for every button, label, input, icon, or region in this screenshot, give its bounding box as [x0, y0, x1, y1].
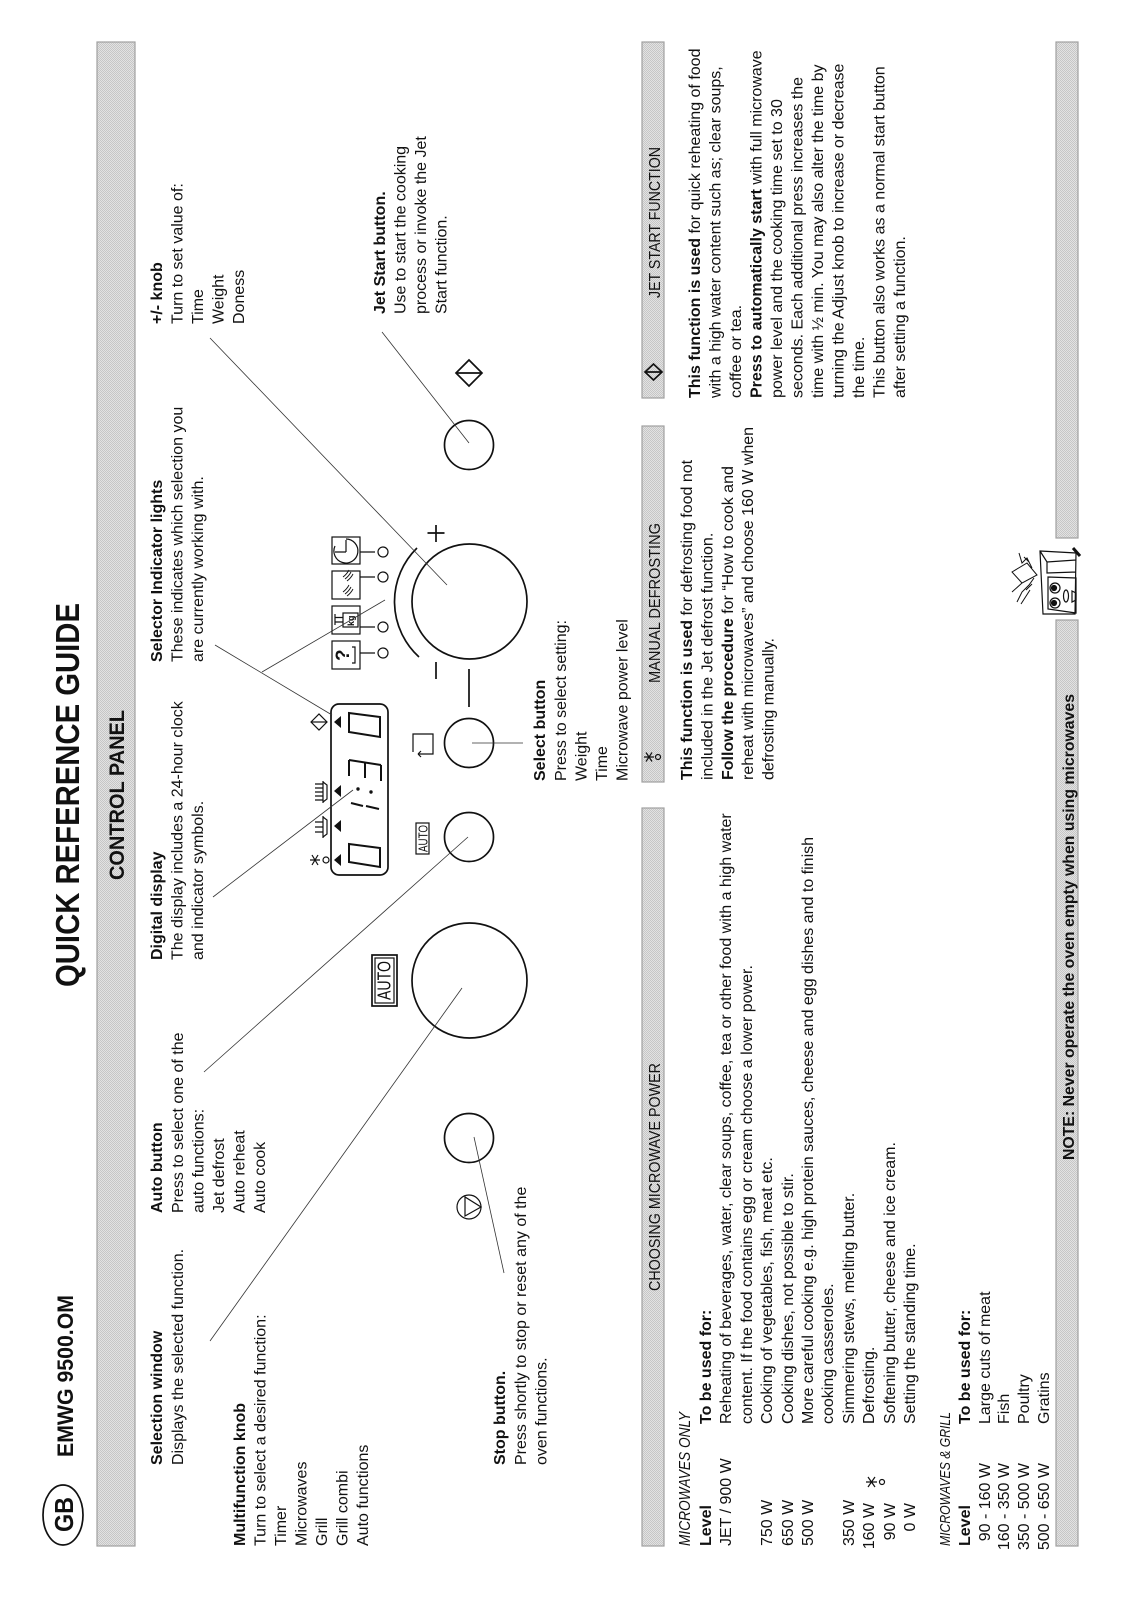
knob arc	[395, 548, 419, 657]
callout: jet start button: process or invoke the Jet	[413, 136, 430, 314]
callout: selection window: Displays the selected function.	[170, 1249, 187, 1465]
table: microwaves only: 0 W	[902, 1502, 919, 1531]
multifunction knob	[412, 923, 527, 1038]
icon: weight box: kg	[346, 615, 356, 626]
icon: jet start diamond in bar	[645, 364, 662, 380]
callout: selection window: Selection window	[149, 1330, 166, 1465]
callout: select button: Time	[594, 746, 611, 781]
icon: jet start diamond	[456, 360, 482, 386]
callout: plus minus knob: +/- knob	[149, 262, 166, 324]
icon: grill symbol	[315, 781, 327, 803]
heading: choosing microwave power: CHOOSING MICROWAVE POWER	[647, 1063, 664, 1291]
callout: multifunction knob: Turn to select a desired function:	[253, 1314, 270, 1546]
table: microwaves only: Cooking of vegetables, fish, meat etc.	[759, 1157, 776, 1424]
icon: display jet diamond	[311, 714, 327, 730]
table: microwaves only: More careful cooking e.g. high protein sauces, cheese and egg dishes and to finish	[800, 837, 817, 1424]
icon: waves box	[332, 570, 360, 599]
digital display	[331, 704, 388, 875]
indicator connectors and lamps	[360, 547, 388, 658]
auto button	[444, 812, 494, 862]
table: microwaves and grill: Gratins	[1036, 1372, 1053, 1424]
callout: selector indicator lights: are currently working with.	[190, 476, 207, 662]
icon: auto label small: AUTO	[416, 825, 430, 852]
model name: EMWG 9500.OM	[53, 1295, 78, 1457]
icon: minus sign	[435, 662, 437, 679]
icon: table defrost snowflake	[866, 1477, 884, 1487]
table: microwaves and grill: Fish	[996, 1394, 1013, 1424]
table: microwaves only: 160 W	[861, 1502, 878, 1549]
stop button	[444, 1114, 494, 1162]
callout: auto button: auto functions:	[190, 1109, 208, 1213]
callout: plus minus knob: Turn to set value of:	[170, 183, 186, 324]
text: manual defrosting: This function is used for defrosting food not	[679, 459, 696, 780]
callout: jet start button: Start function.	[434, 215, 450, 314]
table: microwaves only: 350 W	[841, 1499, 858, 1546]
text: jet start function	[687, 49, 909, 399]
callout: auto button: Auto reheat	[232, 1130, 249, 1213]
table: microwaves only: Simmering stews, melting butter.	[841, 1193, 858, 1424]
note bar: lower segment	[1056, 620, 1078, 1546]
title: QUICK REFERENCE GUIDE	[49, 603, 86, 987]
table: microwaves only: Softening butter, cheese and ice cream.	[882, 1142, 899, 1424]
callout: multifunction knob: Grill combi	[335, 1470, 352, 1546]
callout: jet start button	[372, 136, 450, 314]
table: microwaves only: Reheating of beverages, water, clear soups, coffee, tea or other food with a high water	[718, 813, 735, 1424]
table: microwaves only	[677, 813, 919, 1549]
table: microwaves and grill: Poultry	[1016, 1374, 1033, 1424]
text: manual defrosting: defrosting manually.	[760, 638, 778, 780]
icon: stop symbol	[457, 1195, 481, 1219]
table: microwaves and grill: 350 - 500 W	[1016, 1462, 1033, 1550]
callout: plus minus knob: Weight	[210, 274, 228, 324]
callout: auto button: Auto button	[149, 1122, 166, 1213]
table: microwaves and grill: Large cuts of meat	[977, 1291, 994, 1424]
table: microwaves and grill: 90 - 160 W	[977, 1462, 994, 1541]
callout: stop button: oven functions.	[534, 1357, 550, 1465]
text: jet start function: after setting a function.	[892, 236, 909, 398]
icon: oven face	[1050, 583, 1076, 608]
text: jet start function: with a high water content such as; clear soups,	[708, 66, 724, 399]
digit 0	[349, 844, 380, 867]
header bar: control panel	[97, 42, 135, 1546]
text: manual defrosting: Follow the procedure for “How to cook and	[720, 466, 737, 780]
callout: jet start button: Jet Start button.	[372, 191, 389, 314]
callout: multifunction knob: Microwaves	[294, 1462, 311, 1546]
text: jet start function: This button also works as a normal start button	[872, 66, 888, 398]
callout: select button: Select button	[532, 680, 549, 781]
icon: help box: ?	[333, 649, 354, 661]
icon: oven body	[1040, 551, 1076, 614]
table: microwaves only: 650 W	[780, 1499, 797, 1546]
text: jet start function: This function is used for quick reheating of food	[687, 49, 704, 398]
table: microwaves only: To be used for:	[698, 1310, 715, 1424]
select button	[444, 718, 494, 768]
text: manual defrosting: reheat with microwaves” and choose 160 W when	[740, 427, 757, 780]
callout: auto button	[149, 1032, 269, 1213]
callout: auto button: Press to select one of the	[170, 1032, 187, 1213]
badge: GB country ellipse	[43, 1485, 83, 1545]
callout: plus minus knob: Doness	[231, 270, 248, 324]
section bar: manual defrosting	[642, 426, 664, 782]
heading: jet start function: JET START FUNCTION	[647, 147, 664, 298]
digit 3	[349, 760, 381, 781]
callout: select button: Weight	[574, 731, 590, 781]
callout: selector indicator lights	[149, 407, 207, 662]
heading: control panel: CONTROL PANEL	[106, 710, 129, 880]
text: jet start function: seconds. Each additional press increases the	[790, 77, 806, 398]
digit 1	[351, 803, 379, 809]
icon: clock box	[332, 537, 360, 564]
text: jet start function: coffee or tea.	[728, 305, 745, 398]
text: manual defrosting: included in the Jet defrost function.	[700, 533, 716, 780]
icon: auto selection window	[372, 955, 397, 1006]
table: microwaves only: Defrosting.	[861, 1347, 878, 1424]
callout: multifunction knob: Grill	[314, 1518, 331, 1546]
icon: plus sign	[428, 525, 444, 542]
section bar: choosing microwave power	[642, 808, 664, 1546]
callout: digital display	[149, 700, 207, 960]
callout: auto button: Auto cook	[252, 1141, 269, 1213]
text: jet start function: power level and the cooking time set to 30	[769, 99, 786, 398]
callout: digital display: Digital display	[149, 851, 166, 960]
icon: manual defrosting snowflake	[644, 752, 660, 762]
digit 0	[349, 713, 380, 737]
text: jet start function: turning the Adjust knob to increase or decrease	[830, 63, 848, 398]
oven cartoon	[1012, 548, 1080, 614]
jet start button	[444, 420, 494, 470]
table: microwaves and grill	[937, 1291, 1053, 1550]
table: microwaves and grill: To be used for:	[957, 1310, 974, 1424]
note: NOTE: Never operate the oven empty when using microwaves	[1061, 694, 1078, 1160]
callout: plus minus knob: Time	[190, 289, 207, 324]
table: microwaves only: Setting the standing time.	[902, 1243, 919, 1424]
table: microwaves only: 750 W	[759, 1499, 776, 1546]
callout: stop button	[492, 1187, 550, 1465]
leader lines	[204, 332, 523, 1341]
plus minus knob	[412, 544, 527, 659]
callout: selector indicator lights: Selector Indicator lights	[149, 480, 166, 662]
table: microwaves only: content. If the food contains egg or cream choose a lower power.	[739, 965, 756, 1424]
callout: select button: Press to select setting:	[553, 620, 570, 781]
colon	[356, 787, 373, 794]
icon: defrost snowflake	[310, 855, 329, 865]
table: microwaves and grill: 500 - 650 W	[1036, 1462, 1053, 1550]
selector indicator icons	[332, 537, 388, 669]
callout: stop button: Stop button.	[492, 1371, 509, 1465]
heading: manual defrosting: MANUAL DEFROSTING	[647, 523, 664, 683]
text: jet start function: the time.	[851, 337, 868, 398]
callout: multifunction knob: Multifunction knob	[232, 1403, 249, 1546]
icon: oven corner	[1073, 548, 1080, 556]
table: microwaves only: 500 W	[800, 1499, 817, 1546]
icon: select return arrow	[413, 734, 433, 757]
table: microwaves and grill: 160 - 350 W	[996, 1462, 1013, 1550]
callout: multifunction knob: Auto functions	[355, 1445, 372, 1546]
callout: select button	[532, 619, 632, 781]
indicator triangles	[334, 716, 341, 866]
table: microwaves only: cooking casseroles.	[820, 1283, 837, 1424]
text: jet start function: time with ½ min. You may also alter the time by	[810, 65, 827, 398]
callout: selection window	[149, 1249, 187, 1465]
table: microwaves only: 90 W	[882, 1502, 899, 1540]
section bar: jet start function	[642, 42, 664, 398]
table: microwaves and grill: Level	[957, 1505, 974, 1546]
table: microwaves only: Cooking dishes, not possible to stir.	[780, 1173, 797, 1424]
callout: digital display: The display includes a 24-hour clock	[170, 700, 186, 960]
icon: combi symbol	[315, 816, 327, 838]
note bar: upper segment	[1056, 42, 1078, 538]
table: microwaves and grill: MICROWAVES & GRILL	[937, 1412, 954, 1546]
text: manual defrosting	[679, 427, 778, 780]
connector between knob and select button	[468, 669, 470, 707]
text: jet start function: Press to automatically start with full microwave	[748, 50, 766, 398]
table: microwaves only: MICROWAVES ONLY	[677, 1411, 694, 1546]
control panel diagram	[310, 360, 527, 1219]
callout: selector indicator lights: These indicates which selection you	[170, 407, 186, 662]
country code: GB	[49, 1497, 79, 1532]
callout: jet start button: Use to start the cooking	[392, 146, 410, 314]
icon: hands holding paper	[1012, 553, 1037, 604]
callout: select button: Microwave power level	[614, 619, 632, 781]
callout: plus minus knob	[149, 183, 248, 324]
table: microwaves only: Level	[698, 1505, 715, 1546]
callout: multifunction knob: Timer	[273, 1505, 290, 1546]
table: microwaves only: JET / 900 W	[718, 1457, 735, 1546]
callout: stop button: Press shortly to stop or reset any of the	[513, 1187, 530, 1465]
callout: digital display: and indicator symbols.	[190, 801, 207, 960]
icon: auto selection window: AUTO	[374, 961, 394, 1000]
callout: auto button: Jet defrost	[211, 1138, 228, 1213]
callout: multifunction knob	[232, 1314, 372, 1546]
